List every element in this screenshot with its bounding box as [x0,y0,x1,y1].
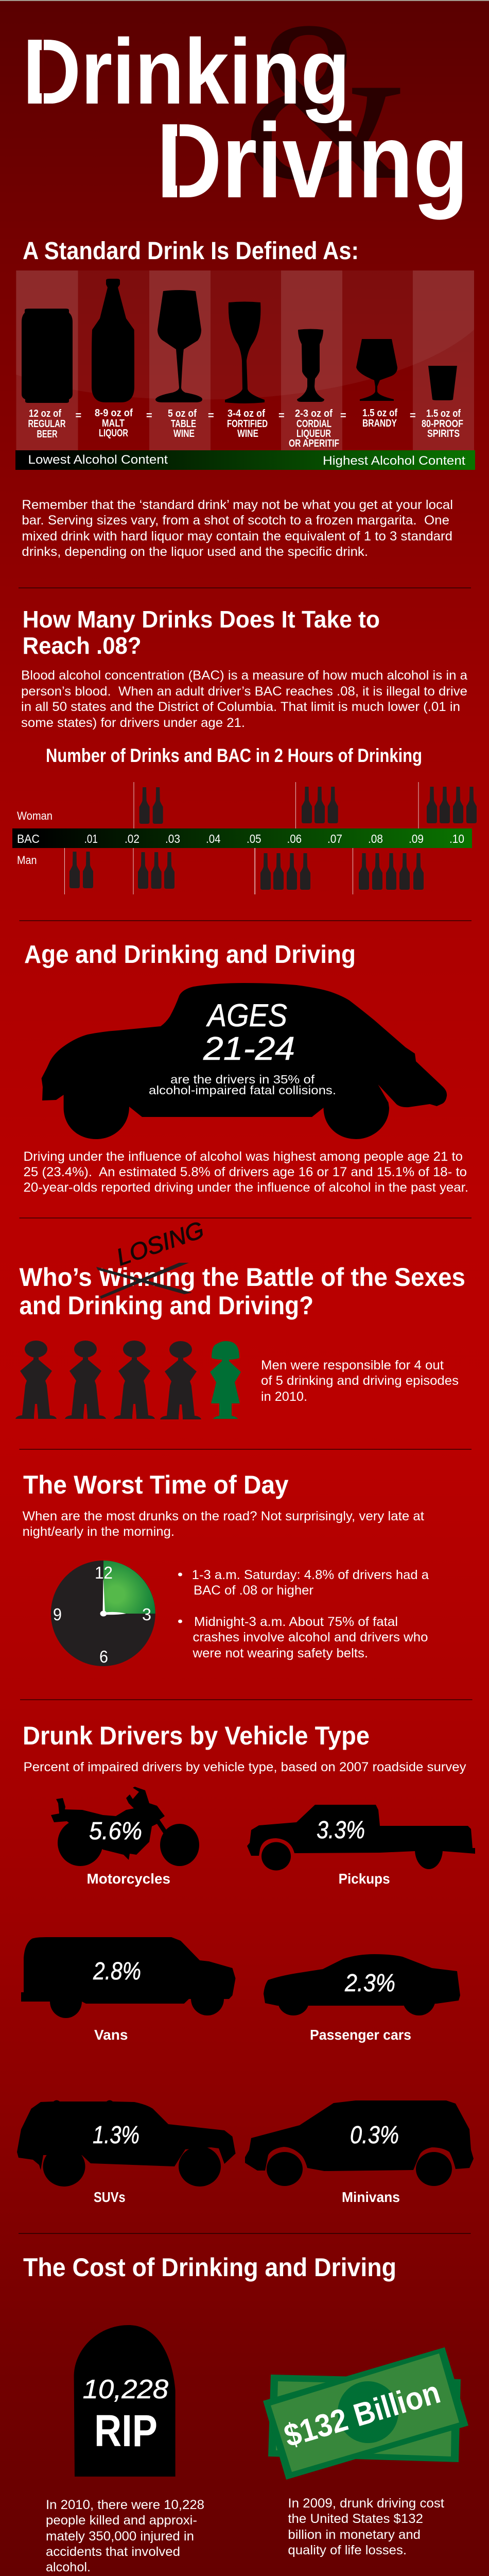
percentage: motorcycles: 5.6% [89,1818,142,1845]
text block: people killed: accidents that involved [46,2545,180,2559]
row label: man: Man [17,854,37,867]
label: vans: Vans [94,2027,128,2043]
text block: worst time intro: When are the most drunks on the road? Not surprisingly, very late at [23,1509,424,1523]
icon: man 2 [65,1341,106,1419]
handwritten word: losing: LOSING [113,1216,207,1270]
heading: battle of the sexes: and Drinking and Driving? [20,1291,313,1320]
label: regular beer: BEER [37,429,58,440]
heading: cost: The Cost of Drinking and Driving [23,2253,396,2282]
text block: age statistics: Driving under the influence of alcohol was highest among people age 21 to [24,1149,463,1164]
text block: monetary cost: quality of life losses. [288,2543,407,2557]
icon: woman [210,1341,241,1419]
text block: BAC explanation [21,668,467,730]
icon: car with ages stat [42,983,447,1139]
passenger car stat [264,1954,460,2043]
label: table wine: 5 oz of [168,408,197,419]
people icons: four men, one woman [15,1341,241,1419]
text block: BAC explanation: some states) for drivers under age 21. [21,716,245,730]
van stat [21,1937,236,2043]
text block: worst time intro [23,1509,424,1539]
deaths number: 10,228 [83,2375,168,2404]
label: malt liquor: MALT [102,418,125,429]
label: minivans: Minivans [342,2189,400,2205]
text block: worst time intro: night/early in the morning. [23,1524,174,1539]
icon: man 3 [114,1341,155,1419]
BAC scale bar: .06 [287,832,302,845]
chart: drinks and BAC [12,782,477,894]
label: table wine [168,408,197,439]
icon: beer can [22,309,73,403]
label: pickups: Pickups [339,1871,390,1887]
text block: age statistics: 25 (23.4%). An estimated 5.8% of drivers age 16 or 17 and 15.1% of 18- to [24,1165,467,1179]
label: fortified wine: WINE [237,428,258,439]
icon: clock: 3 [142,1605,151,1624]
alcohol content scale [15,450,475,470]
icon: clock [51,1561,155,1666]
pickup stat [247,1805,475,1887]
label: passenger cars: Passenger cars [310,2027,411,2043]
heading: battle of the sexes [20,1216,465,1320]
ages number: 21-24 [203,1030,295,1067]
icon: van [21,1937,236,2018]
icon: clock: 6 [99,1647,108,1666]
text block: monetary cost: the United States $132 [288,2512,423,2526]
label: table wine: WINE [173,428,195,439]
bullet list: time statistics: crashes involve alcohol and drivers who [193,1630,428,1645]
heading: how many drinks: Reach .08? [23,632,142,659]
equals signs [75,410,416,421]
ages number: AGES [205,998,287,1033]
icon: man 4 [160,1341,201,1419]
equals signs: = [278,410,285,421]
icon: fortified wine glass [225,302,265,403]
percentage: SUVs: 1.3% [93,2122,139,2149]
label: malt liquor: LIQUOR [99,428,128,439]
text block: men responsible [261,1358,459,1404]
man bottles: 2 drinks [69,852,93,888]
bullet list: time statistics: Midnight-3 a.m. About 75% of fatal [194,1615,398,1629]
woman bottles: 4 drinks [427,787,477,823]
icon: pickup [247,1805,475,1870]
text block: men responsible: Men were responsible for 4 out [261,1358,444,1372]
label: SUVs: SUVs [94,2189,126,2205]
BAC scale bar: BAC [17,832,40,845]
icon: dollar bills [263,2347,468,2480]
icon: passenger car [264,1954,460,2015]
label: cordial: OR APERITIF [289,438,339,449]
equals signs: = [410,410,416,421]
bullet list: time statistics: BAC of .08 or higher [194,1583,313,1598]
text block: standard drink note: mixed drink with hard liquor may contain the equivalent of 1 to 3 standard [22,529,452,544]
text block: people killed: alcohol. [46,2560,91,2574]
bullet list: time statistics: were not wearing safety belts. [192,1646,368,1660]
label: cordial: CORDIAL [296,418,331,430]
alcohol content scale: Highest Alcohol Content [323,454,465,468]
heading: how many drinks: How Many Drinks Does It Take to [23,606,380,633]
percentage: vans: 2.8% [93,1958,141,1985]
label: brandy: BRANDY [362,418,397,429]
text block: monetary cost [288,2496,444,2557]
label: regular beer [28,408,66,440]
equals signs: = [340,410,346,421]
cost amount: $132 Billion [280,2375,444,2454]
label: cordial: LIQUEUR [296,428,331,439]
label: spirits: SPIRITS [427,428,460,439]
car caption: are the drivers in 35% of [170,1073,315,1086]
label: spirits: 1.5 oz of [426,408,461,419]
heading: age: Age and Drinking and Driving [24,941,356,969]
chart heading: Number of Drinks and BAC in 2 Hours of Drinking [46,745,422,766]
icon: cordial glass [297,329,324,402]
text block: standard drink note: bar. Serving sizes vary, from a shot of scotch to a frozen margarita. One [22,513,449,528]
icon: table wine glass [155,290,202,402]
heading: standard drink: A Standard Drink Is Defined As: [23,238,359,265]
label: fortified wine: FORTIFIED [227,418,268,430]
label: brandy [362,408,397,429]
BAC scale bar: .02 [125,832,139,845]
text block: men responsible: in 2010. [261,1389,307,1404]
percentage: pickups: 3.3% [317,1817,365,1844]
percentage: minivans: 0.3% [350,2122,399,2149]
equals signs: = [208,410,214,421]
RIP: RIP [94,2406,158,2456]
BAC scale bar: .08 [368,832,383,845]
icon: minivan [245,2100,474,2186]
subheading: vehicle type: Percent of impaired drivers by vehicle type, based on 2007 roadside survey [24,1760,466,1774]
man bottles: 3 drinks [138,852,174,889]
text block: people killed: In 2010, there were 10,228 [46,2498,204,2512]
man bottles: 4 drinks [260,853,310,890]
label: table wine: TABLE [171,418,196,430]
label: motorcycles: Motorcycles [86,1871,170,1887]
heading: how many drinks [23,606,380,659]
scribbled cross [96,1263,192,1299]
BAC scale bar: .03 [165,832,180,845]
icon: motorcycle [51,1787,199,1866]
label: brandy: 1.5 oz of [362,408,397,419]
text block: standard drink note [22,498,453,559]
label: fortified wine [227,408,268,439]
motorcycle stat [51,1787,199,1887]
label: cordial [289,408,339,449]
BAC scale bar: .05 [247,832,261,845]
SUV stat [17,2100,236,2205]
BAC scale bar [12,828,472,848]
heading: battle of the sexes: Who’s Winning the Battle of the Sexes [20,1263,465,1292]
panel: standard drinks [16,270,474,450]
icon: clock: 9 [53,1605,62,1624]
BAC scale bar: .04 [206,832,221,845]
label: regular beer: 12 oz of [29,408,61,419]
label: spirits: 80-PROOF [422,418,463,430]
icon: malt liquor bottle [92,279,134,402]
title: Drinking [23,20,350,124]
equals signs: = [75,410,81,421]
BAC scale bar: .01 [84,832,98,845]
title [23,20,468,220]
text block: people killed: people killed and approxi- [46,2513,197,2528]
text block: people killed [46,2498,204,2574]
text block: monetary cost: In 2009, drunk driving cost [288,2496,444,2511]
car caption [149,1073,336,1097]
heading: worst time: The Worst Time of Day [23,1470,289,1499]
percentage: passenger cars: 2.3% [344,1970,395,1997]
icon: SUV [17,2100,236,2187]
label: malt liquor [95,408,133,439]
car caption: alcohol-impaired fatal collisions. [149,1083,336,1097]
BAC scale bar: .09 [409,832,424,845]
label: regular beer: REGULAR [28,418,66,430]
heading: vehicle type: Drunk Drivers by Vehicle Type [23,1721,370,1750]
icon: tombstone with deaths [74,2325,176,2477]
woman bottles: 3 drinks [302,787,338,823]
icon: clock: 12 [95,1563,113,1582]
label: fortified wine: 3-4 oz of [228,408,265,419]
BAC scale bar: .10 [449,832,464,845]
ages number [203,998,295,1067]
alcohol content scale: Lowest Alcohol Content [28,453,168,467]
text block: people killed: mately 350,000 injured in [46,2529,194,2544]
text block: BAC explanation: in all 50 states and the District of Columbia. That limit is much lower (.01 in [21,700,460,714]
row label: woman: Woman [17,809,53,822]
minivan stat [245,2100,474,2205]
text block: monetary cost: billion in monetary and [288,2528,421,2542]
equals signs: = [146,410,152,421]
icon: shot glass [428,366,457,400]
bullet list: time statistics [178,1568,429,1660]
text block: age statistics [24,1149,468,1195]
text block: standard drink note: drinks, depending on the liquor used and the specific drink. [22,545,368,559]
icon: brandy glass [356,339,397,401]
label: malt liquor: 8-9 oz of [95,408,133,419]
text block: BAC explanation: Blood alcohol concentration (BAC) is a measure of how much alcohol is in a [21,668,467,683]
text block: men responsible: of 5 drinking and driving episodes [261,1374,459,1388]
label: spirits [422,408,463,439]
icon: man 1 [15,1341,57,1419]
text block: BAC explanation: person’s blood. When an adult driver’s BAC reaches .08, it is illegal to drive [21,684,467,699]
bullet list: time statistics: 1-3 a.m. Saturday: 4.8% of drivers had a [192,1568,429,1582]
woman bottles: 2 drinks [139,787,163,824]
text block: age statistics: 20-year-olds reported driving under the influence of alcohol in the past year. [24,1180,468,1195]
man bottles: 5 drinks [359,853,424,890]
BAC scale bar: .07 [327,832,342,845]
text block: standard drink note: Remember that the ‘standard drink’ may not be what you get at your local [22,498,453,512]
label: cordial: 2-3 oz of [295,408,333,419]
